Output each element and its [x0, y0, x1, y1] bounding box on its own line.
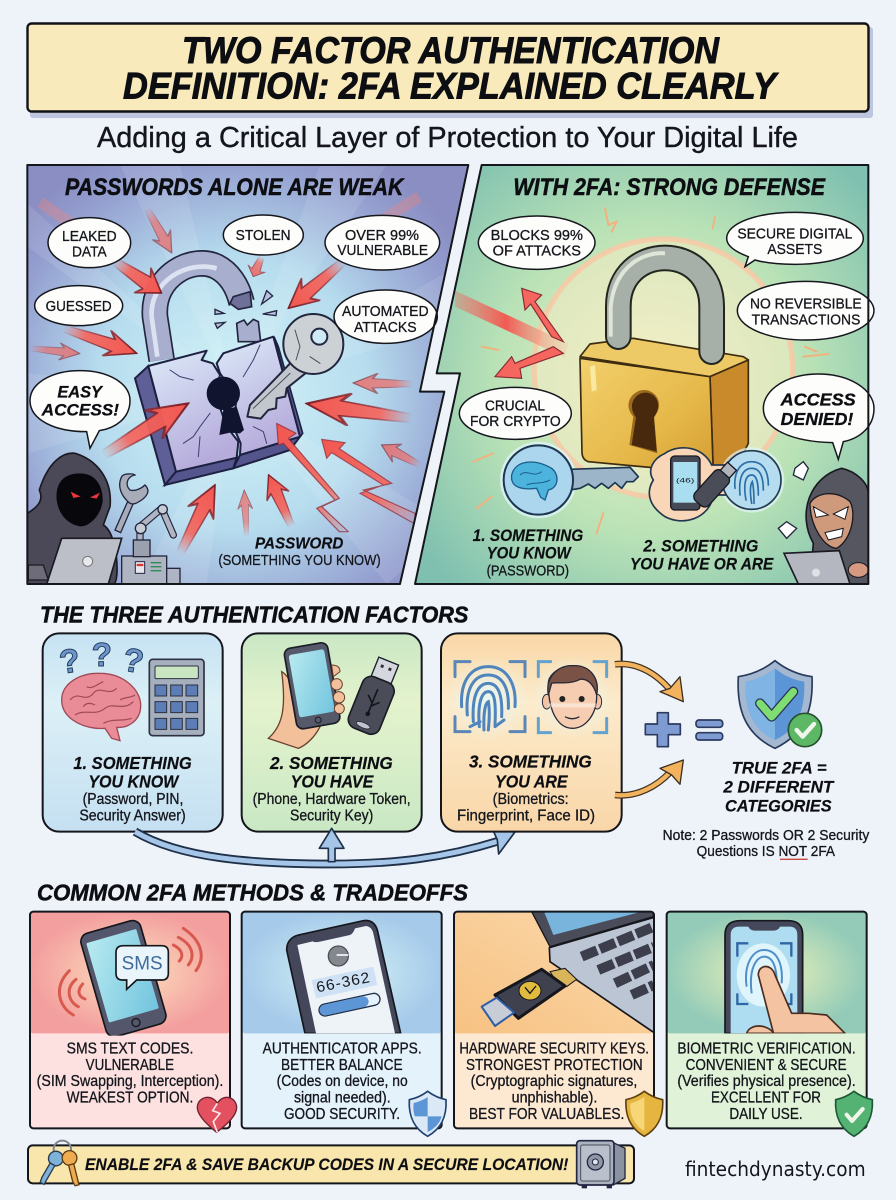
card: something you know: YOU KNOW	[88, 772, 180, 792]
banner: enable 2fa	[28, 1145, 634, 1183]
icon: question marks	[57, 637, 147, 682]
card: hardware security keys	[454, 912, 663, 1136]
card: something you are: (Biometrics:	[493, 791, 569, 808]
caption: something you know	[473, 526, 583, 580]
bubble: over 99% vulnerable: OVER 99%	[345, 227, 419, 244]
icon: fingerprint on phone	[725, 921, 845, 1033]
banner: enable 2fa: ENABLE 2FA & SAVE BACKUP CODES IN A SECURE LOCATION!	[85, 1155, 569, 1174]
label: true 2fa: CATEGORIES	[725, 797, 832, 816]
card: sms text codes	[30, 912, 237, 1132]
red attack arrows	[29, 203, 425, 560]
card: hardware security keys: BEST FOR VALUABLES.	[469, 1106, 624, 1123]
bubble: no reversible transactions	[737, 281, 874, 340]
icon: broken padlock	[135, 263, 303, 485]
bubble: leaked data: LEAKED	[62, 228, 117, 245]
icon: safe	[577, 1141, 625, 1188]
card: biometric verification: CONVENIENT & SECURE	[686, 1057, 847, 1074]
icon: equals sign	[696, 720, 723, 740]
card: sms text codes: (SIM Swapping, Interception).	[37, 1073, 223, 1090]
caption: something you have or are: YOU HAVE OR ARE	[630, 554, 774, 573]
heading: common 2fa methods: COMMON 2FA METHODS & TRADEOFFS	[37, 880, 469, 906]
card: hardware security keys: HARDWARE SECURITY KEYS.	[459, 1040, 649, 1057]
card: authenticator apps: GOOD SECURITY.	[284, 1106, 400, 1123]
card: sms text codes: SMS TEXT CODES.	[67, 1040, 193, 1057]
arrow: orange bottom	[615, 760, 683, 795]
section: three authentication factors	[40, 601, 515, 864]
card: hardware security keys: (Cryptographic signatures,	[471, 1073, 637, 1090]
icon: hand holding phone	[268, 642, 345, 748]
card: something you know: (Password, PIN,	[83, 791, 183, 808]
bubble: easy access: EASY	[57, 382, 104, 401]
icon: question marks: ?	[92, 637, 112, 674]
bubble: access denied: DENIED!	[781, 409, 853, 429]
panel: with 2fa strong defense	[415, 165, 874, 584]
caption: something you know: (PASSWORD)	[487, 563, 569, 580]
bubble: guessed	[35, 286, 123, 326]
bubble: over 99% vulnerable: VULNERABLE	[337, 242, 428, 259]
panel heading: WITH 2FA: STRONG DEFENSE	[513, 174, 826, 201]
card: authenticator apps: (Codes on device, no	[277, 1073, 408, 1090]
card: hardware security keys: unphishable).	[512, 1089, 597, 1106]
bubble: over 99% vulnerable	[325, 215, 440, 270]
card: biometric verification	[667, 912, 872, 1136]
bubble: blocks 99% of attacks: BLOCKS 99%	[491, 227, 583, 244]
bubble: access denied	[763, 374, 874, 459]
icon: usb key in laptop	[482, 912, 654, 1033]
panel: passwords alone are weak	[27, 165, 468, 584]
icon: automated robot arm and wrench	[115, 474, 180, 584]
label: true 2fa: 2 DIFFERENT	[722, 777, 835, 796]
icon: authenticator phone: 66-362	[315, 969, 372, 996]
note	[663, 828, 870, 860]
caption: something you have or are: 2. SOMETHING	[642, 537, 758, 556]
force field bubble	[534, 239, 793, 498]
title banner: DEFINITION: 2FA EXPLAINED CLEARLY	[123, 66, 779, 106]
bubble: no reversible transactions: TRANSACTIONS	[752, 312, 860, 329]
icon: plus sign	[645, 713, 680, 747]
label: true 2fa: TRUE 2FA =	[732, 758, 827, 777]
icon: pink brain	[62, 673, 141, 741]
card: authenticator apps: signal needed).	[294, 1089, 391, 1106]
caption: password: (SOMETHING YOU KNOW)	[218, 552, 381, 569]
caption: password: PASSWORD	[255, 535, 343, 552]
icon: sms phone	[59, 919, 201, 1039]
icon: angry hooded attacker	[778, 462, 868, 584]
icon: hooded hacker with laptop	[27, 453, 122, 584]
bubble: automated attacks: ATTACKS	[354, 319, 417, 336]
arrows striking the lock	[95, 249, 348, 532]
card: something you have: YOU HAVE	[291, 772, 374, 792]
bubble: stolen: STOLEN	[236, 227, 291, 244]
card: something you have: 2. SOMETHING	[269, 753, 393, 773]
card: authenticator apps	[242, 912, 446, 1136]
note: Questions IS NOT 2FA	[697, 844, 835, 860]
card: something you are	[441, 633, 622, 832]
caption: password	[218, 535, 381, 569]
card: something you know: 1. SOMETHING	[73, 753, 192, 773]
bubble: crucial for crypto: CRUCIAL	[485, 398, 545, 415]
card: sms text codes: VULNERABLE	[86, 1057, 174, 1074]
bubble: secure digital assets: ASSETS	[767, 241, 822, 258]
heading: three factors: THE THREE AUTHENTICATION FACTORS	[40, 601, 468, 627]
bubble: crucial for crypto	[459, 387, 571, 439]
icon: usb hardware token	[345, 655, 404, 737]
bubble: blocks 99% of attacks	[478, 216, 595, 269]
card: something you are: 3. SOMETHING	[469, 752, 592, 772]
caption: something you know: YOU KNOW	[487, 543, 572, 562]
card: biometric verification: BIOMETRIC VERIFICATION.	[677, 1040, 856, 1057]
cards: hardware and biometric	[454, 912, 872, 1188]
icon: fingerprint scan	[455, 662, 525, 732]
bubble: blocks 99% of attacks: OF ATTACKS	[493, 242, 581, 259]
key with brain: something you know	[500, 442, 638, 518]
note: Note: 2 Passwords OR 2 Security	[663, 828, 870, 844]
card: something you have: Security Key)	[290, 808, 373, 825]
icon: authenticator phone	[287, 921, 401, 1033]
card: something you have: (Phone, Hardware Token,	[253, 791, 411, 808]
caption: something you know: 1. SOMETHING	[473, 526, 583, 545]
icon: golden padlock	[580, 253, 748, 473]
card: authenticator apps: AUTHENTICATOR APPS.	[263, 1040, 422, 1057]
bubble: secure digital assets: SECURE DIGITAL	[737, 226, 852, 243]
icon: key ring	[35, 1141, 84, 1187]
card: biometric verification: (Verifies physical presence).	[677, 1073, 856, 1090]
phone, token and fingerprint: something you have or are	[649, 447, 784, 521]
bubble: secure digital assets	[727, 212, 863, 267]
arrow: combine factors curve	[135, 828, 515, 864]
section: biometric card and true 2fa equation	[441, 633, 870, 860]
bubble: access denied: ACCESS	[780, 389, 856, 409]
card: something you have	[242, 633, 422, 832]
label: true 2fa	[722, 758, 835, 816]
card: sms text codes: WEAKEST OPTION.	[67, 1089, 193, 1106]
icon: blue shield	[409, 1091, 446, 1136]
bubble: no reversible transactions: NO REVERSIBLE	[750, 296, 862, 313]
panel heading: PASSWORDS ALONE ARE WEAK	[65, 174, 405, 201]
deflected red arrows	[455, 208, 828, 533]
bubble: leaked data: DATA	[72, 244, 107, 261]
website credit: fintechdynasty.com	[685, 1157, 866, 1181]
icon: gold shield	[626, 1091, 663, 1136]
title banner	[28, 24, 873, 118]
icon: verified shield	[738, 661, 822, 748]
bubble: automated attacks	[334, 290, 437, 343]
icon: cracked key	[247, 314, 343, 419]
icon: question marks: ?	[120, 641, 147, 681]
bubble: leaked data	[48, 218, 131, 268]
card: hardware security keys: STRONGEST PROTECTION	[466, 1057, 643, 1074]
bubble: easy access: ACCESS!	[41, 400, 119, 419]
icon: green shield	[836, 1091, 872, 1136]
card: biometric verification: EXCELLENT FOR	[711, 1089, 821, 1106]
cards: sms and authenticator	[28, 912, 634, 1187]
card: authenticator apps: BETTER BALANCE	[281, 1057, 403, 1074]
phone, token and fingerprint: something you have or are: (46)	[676, 478, 694, 485]
icon: keypad calculator	[149, 659, 204, 736]
card: something you know: Security Answer)	[79, 808, 186, 825]
icon: sms phone: SMS	[122, 953, 163, 974]
title banner: TWO FACTOR AUTHENTICATION	[182, 30, 720, 71]
bubble: easy access	[30, 371, 130, 448]
bubble: guessed: GUESSED	[46, 298, 112, 315]
bubble: stolen	[223, 215, 303, 255]
bubble: crucial for crypto: FOR CRYPTO	[470, 413, 561, 430]
icon: face id scan	[538, 662, 607, 733]
card: something you are: YOU ARE	[495, 772, 568, 792]
arrow: orange top	[615, 664, 683, 702]
card: something you are: Fingerprint, Face ID)	[457, 808, 595, 825]
subtitle: Adding a Critical Layer of Protection to Your Digital Life	[97, 122, 798, 154]
caption: something you have or are	[630, 537, 774, 573]
icon: question marks: ?	[57, 642, 82, 682]
card: something you know	[43, 633, 223, 832]
card: biometric verification: DAILY USE.	[729, 1106, 803, 1123]
bubble: automated attacks: AUTOMATED	[342, 303, 429, 320]
icon: broken heart	[197, 1097, 237, 1132]
